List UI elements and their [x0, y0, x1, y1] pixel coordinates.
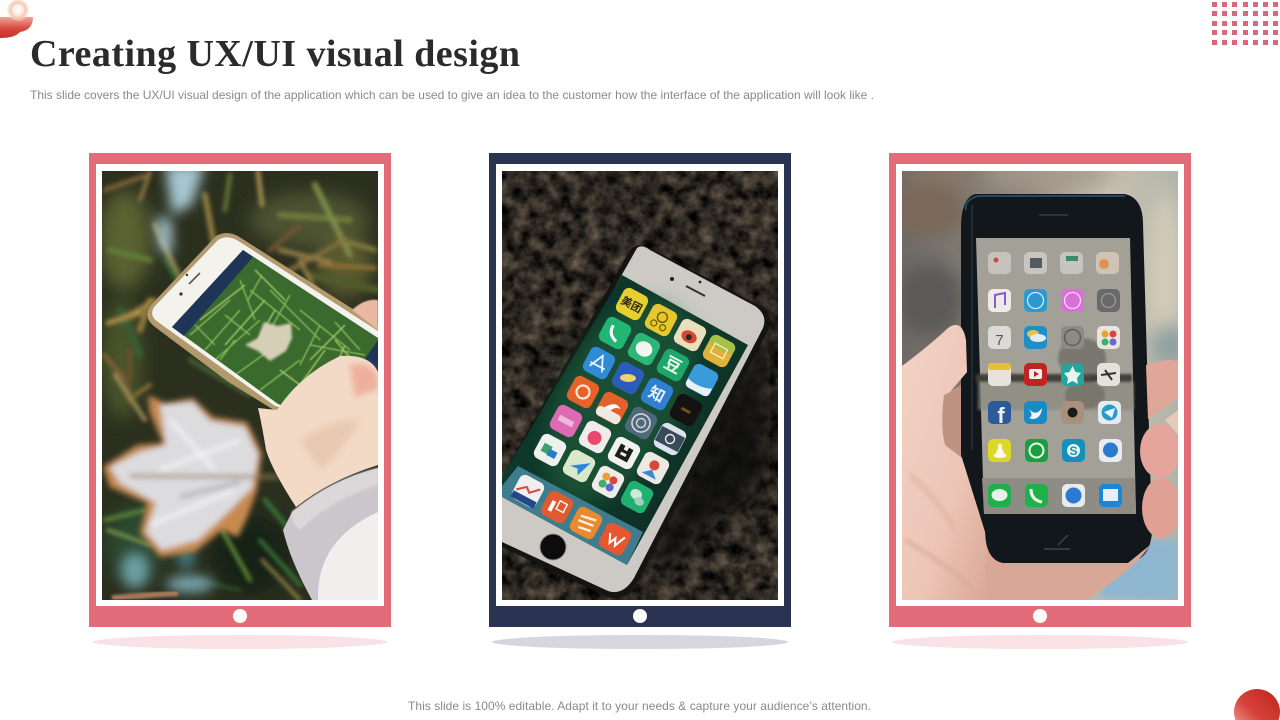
phone being held [147, 233, 378, 410]
tablet shadow [93, 635, 387, 649]
decorative dot grid [1212, 2, 1278, 45]
phone earpiece [1039, 214, 1068, 216]
big frosted leaf [103, 395, 280, 557]
panel: right tablet [885, 153, 1191, 649]
phone earpiece and camera [670, 277, 705, 296]
subtitle: This slide covers the UX/UI visual design of the application which can be used to give an idea to the customer how the interface of the application will look like . [30, 88, 874, 102]
phone home button [540, 534, 566, 560]
phone screen with apps: 美团 [619, 293, 645, 316]
tablet screen border [496, 164, 784, 606]
tablet frame [489, 153, 791, 627]
tablet frame [889, 153, 1191, 627]
home button [633, 609, 647, 623]
photo: hand holding a black phone [902, 171, 1178, 600]
panel: left tablet [89, 153, 391, 649]
phone screen with apps: S [1069, 444, 1078, 458]
footer note: This slide is 100% editable. Adapt it to your needs & capture your audience’s attention. [408, 699, 871, 713]
panel: center tablet [489, 153, 791, 649]
decorative corner circle [1234, 689, 1280, 720]
photo: hand photographing a leaf [99, 165, 378, 600]
decorative logo: red blob with ring [0, 0, 33, 38]
tablet shadow [492, 635, 788, 649]
phone screen with apps [976, 238, 1136, 514]
hand holding the phone [902, 325, 1180, 600]
tablet screen border [96, 164, 384, 606]
phone screen with apps: 7 [995, 332, 1004, 349]
small leaf on phone screen [245, 322, 292, 361]
tablet shadow [892, 635, 1188, 649]
black phone case [502, 245, 769, 598]
fingers behind phone [942, 385, 966, 468]
phone home button glint [1044, 535, 1070, 549]
photo: phone on granite surface [502, 171, 778, 600]
white phone body [502, 246, 764, 592]
home button [233, 609, 247, 623]
phone screen with apps [502, 275, 748, 565]
phone screen with apps: 知 [645, 382, 668, 407]
title: Creating UX/UI visual design [30, 33, 520, 75]
phone screen with apps: 豆 [661, 353, 685, 378]
tablet screen border [896, 164, 1184, 606]
hand, fingers and sleeve [258, 300, 378, 600]
tablet frame [89, 153, 391, 627]
home button [1033, 609, 1047, 623]
palm under phone [975, 500, 1152, 590]
black phone body [961, 194, 1152, 563]
phone earpiece and camera [179, 273, 200, 296]
phone screen with apps: f [997, 403, 1005, 428]
